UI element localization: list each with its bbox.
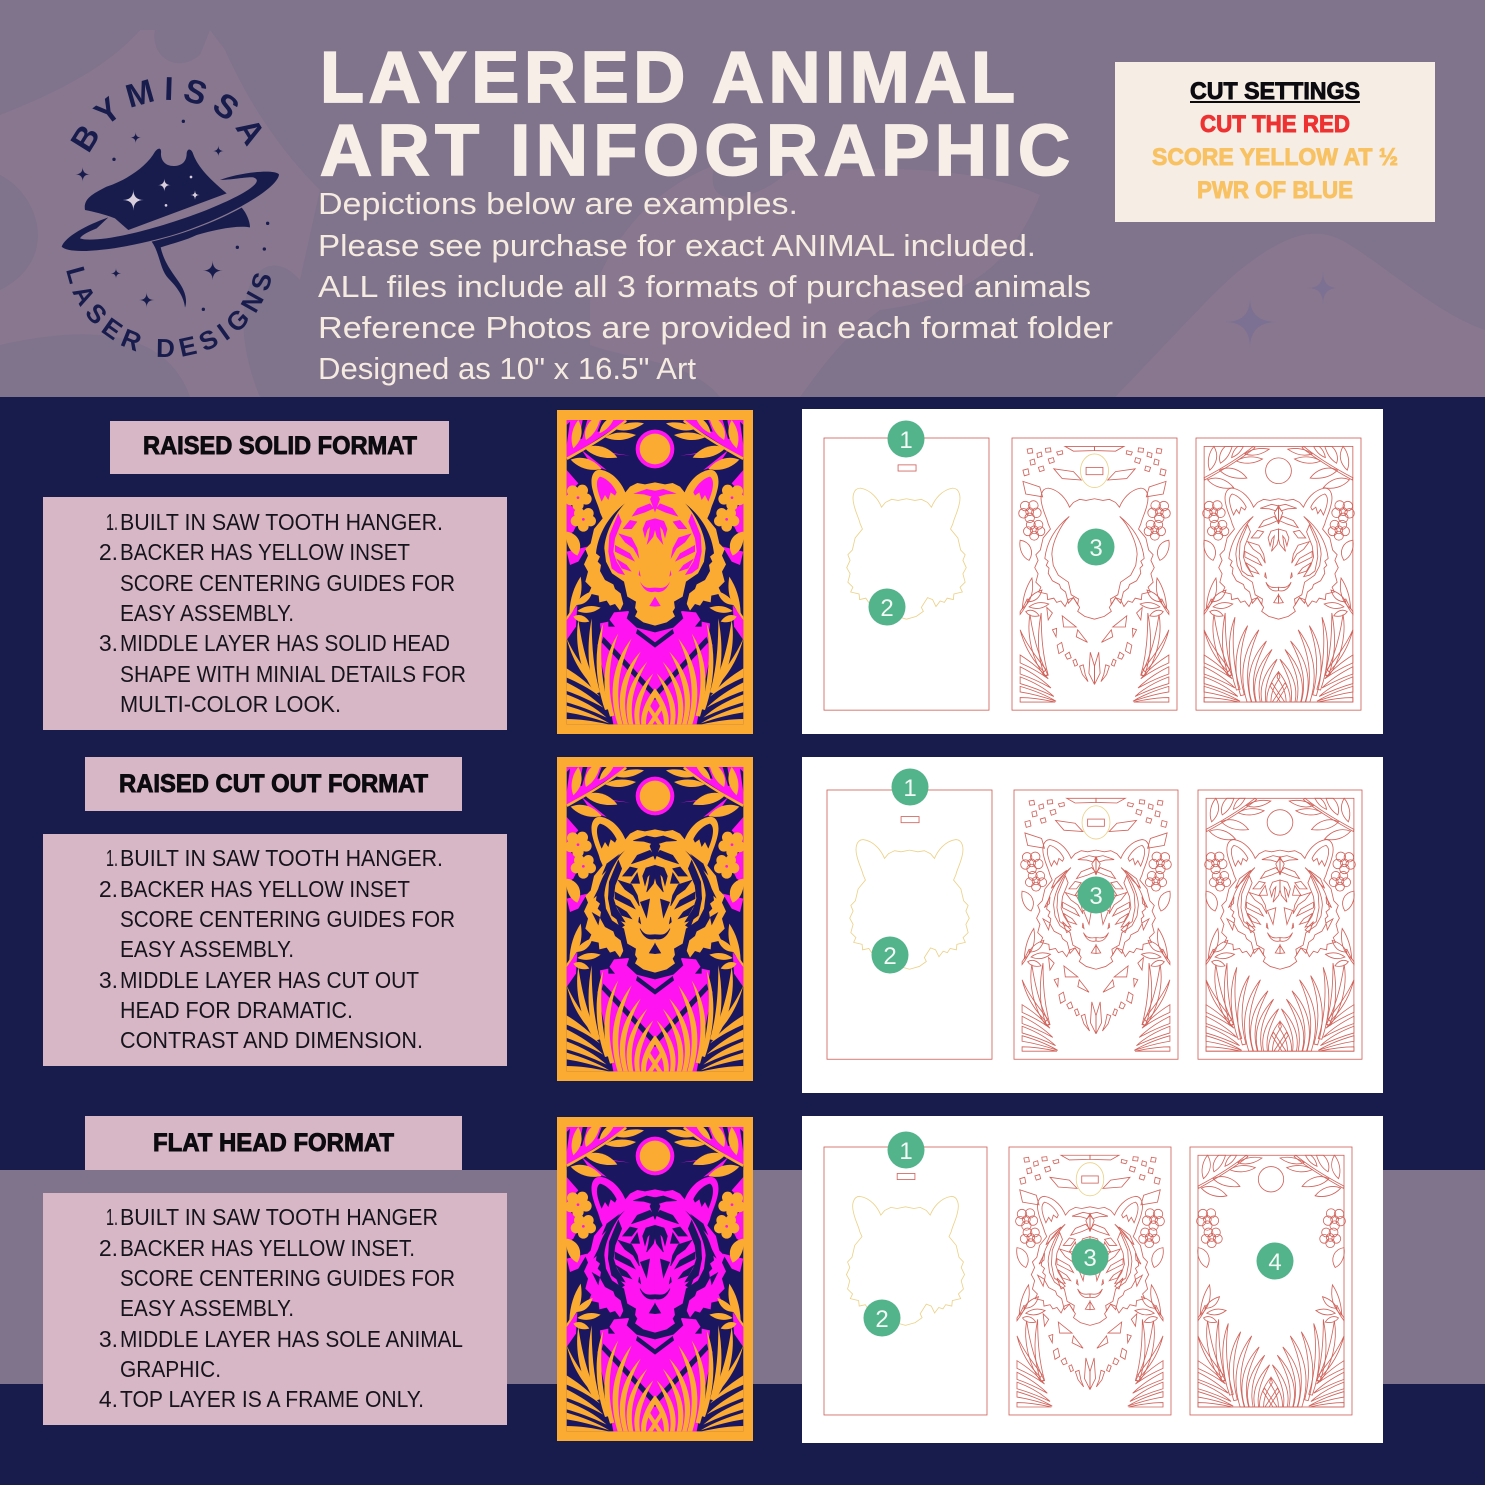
- text block: flat head format steps: 1.: [106, 1204, 118, 1230]
- badge 2: 2: [883, 943, 897, 970]
- badge 2: [872, 936, 908, 974]
- text block: raised cut out format steps: SCORE CENTERING GUIDES FOR: [120, 906, 455, 932]
- tiger art: raised cut out: [557, 757, 753, 1081]
- text block: raised cut out format steps: EASY ASSEMBLY.: [120, 936, 294, 962]
- badge 4: 4: [1268, 1249, 1282, 1276]
- text block: raised cut out format steps: HEAD FOR DRAMATIC.: [120, 997, 353, 1023]
- panel: raised solid layers: [802, 409, 1383, 734]
- badge 1: [888, 1132, 924, 1168]
- layer 3: top: [1196, 438, 1361, 710]
- text block: flat head format steps: EASY ASSEMBLY.: [120, 1295, 294, 1321]
- callout: cut settings: PWR OF BLUE: [1197, 177, 1353, 204]
- description text: [318, 186, 1113, 386]
- text block: raised solid format steps: 3.: [99, 630, 118, 656]
- text block: flat head format steps: 3.: [99, 1326, 118, 1352]
- description text: Depictions below are examples.: [318, 186, 798, 221]
- callout: cut settings: CUT SETTINGS: [1190, 78, 1360, 105]
- badge 1: 1: [899, 1138, 913, 1165]
- badge 3: [1078, 528, 1114, 566]
- layer 3: top frame: [1190, 1147, 1352, 1415]
- icon: manta ray with ring: [62, 120, 279, 311]
- badge 2: 2: [875, 1306, 889, 1333]
- layer 2: middle: [1012, 438, 1177, 710]
- layer 1: backer: [824, 438, 989, 710]
- text block: raised cut out format steps: 3.: [99, 967, 118, 993]
- text block: flat head format steps: TOP LAYER IS A FRAME ONLY.: [120, 1386, 424, 1412]
- badge 2: 2: [880, 595, 894, 622]
- text block: raised solid format steps: 2.: [99, 539, 118, 565]
- text block: raised cut out format steps: MIDDLE LAYER HAS CUT OUT: [120, 967, 419, 993]
- heading: raised cut out format: [85, 757, 462, 811]
- text block: raised solid format steps: MIDDLE LAYER HAS SOLID HEAD: [120, 630, 450, 656]
- logo text: brand top: BYMISSA: [70, 77, 262, 152]
- logo: [62, 77, 279, 357]
- text block: raised solid format steps: MULTI-COLOR LOOK.: [120, 691, 341, 717]
- text block: raised solid format steps: SCORE CENTERING GUIDES FOR: [120, 570, 455, 596]
- badge 3: 3: [1089, 883, 1103, 910]
- description text: Designed as 10" x 16.5" Art: [318, 351, 696, 386]
- text block: raised solid format steps: EASY ASSEMBLY.: [120, 600, 294, 626]
- panel: flat head layers: [802, 1116, 1383, 1443]
- text block: flat head format steps: [43, 1193, 507, 1425]
- text block: flat head format steps: SCORE CENTERING GUIDES FOR: [120, 1265, 455, 1291]
- title: [320, 38, 1070, 191]
- heading: raised cut out format: RAISED CUT OUT FORMAT: [119, 770, 428, 798]
- callout: cut settings: SCORE YELLOW AT ½: [1152, 144, 1398, 171]
- badge 2: [868, 588, 906, 626]
- badge 1: 1: [903, 775, 917, 802]
- text block: raised cut out format steps: 1.: [106, 845, 118, 871]
- callout: cut settings: [1115, 62, 1435, 222]
- badge 3: [1078, 876, 1114, 914]
- description text: Please see purchase for exact ANIMAL included.: [318, 228, 1036, 263]
- text block: raised cut out format steps: [43, 834, 507, 1066]
- text block: flat head format steps: 2.: [99, 1235, 118, 1261]
- title: ART INFOGRAPHIC: [320, 111, 1070, 191]
- layer 1: backer: [824, 1147, 987, 1415]
- text block: flat head format steps: BUILT IN SAW TOOTH HANGER: [120, 1204, 438, 1230]
- text block: raised cut out format steps: 2.: [99, 876, 118, 902]
- text block: flat head format steps: MIDDLE LAYER HAS SOLE ANIMAL: [120, 1326, 463, 1352]
- badge 3: 3: [1089, 535, 1103, 562]
- heading: raised solid format: RAISED SOLID FORMAT: [143, 432, 417, 460]
- header band: [0, 0, 1485, 397]
- badge 2: [864, 1300, 900, 1336]
- text block: raised cut out format steps: BUILT IN SAW TOOTH HANGER.: [120, 845, 443, 871]
- description text: Reference Photos are provided in each format folder: [318, 310, 1113, 345]
- heading: raised solid format: [110, 421, 449, 474]
- layer 1: backer: [827, 790, 992, 1059]
- badge 3: [1072, 1238, 1108, 1276]
- text block: raised solid format steps: [43, 497, 507, 730]
- text block: raised solid format steps: SHAPE WITH MINIAL DETAILS FOR: [120, 661, 466, 687]
- badge 1: 1: [899, 427, 913, 454]
- text block: raised cut out format steps: CONTRAST AND DIMENSION.: [120, 1027, 423, 1053]
- logo text: brand bottom: LASER DESIGNS: [66, 266, 271, 357]
- text block: flat head format steps: GRAPHIC.: [120, 1356, 221, 1382]
- badge 1: [888, 420, 924, 458]
- badge 3: 3: [1083, 1245, 1097, 1272]
- text block: flat head format steps: 4.: [99, 1386, 118, 1412]
- heading: flat head format: [85, 1116, 462, 1170]
- panel: raised cut out layers: [802, 757, 1383, 1093]
- title: LAYERED ANIMAL: [320, 38, 1015, 118]
- tiger art: raised solid: [557, 410, 753, 734]
- layer 2: middle: [1014, 790, 1178, 1059]
- badge 1: [892, 768, 928, 806]
- layer 3: top: [1198, 790, 1362, 1059]
- layer 2: middle: [1009, 1147, 1171, 1415]
- text block: raised solid format steps: 1.: [106, 509, 118, 535]
- description text: ALL files include all 3 formats of purchased animals: [318, 269, 1091, 304]
- badge 4: [1256, 1242, 1294, 1280]
- text block: flat head format steps: BACKER HAS YELLOW INSET.: [120, 1235, 415, 1261]
- heading: flat head format: FLAT HEAD FORMAT: [153, 1129, 394, 1157]
- text block: raised solid format steps: BACKER HAS YELLOW INSET: [120, 539, 410, 565]
- callout: cut settings: CUT THE RED: [1200, 111, 1350, 138]
- text block: raised cut out format steps: BACKER HAS YELLOW INSET: [120, 876, 410, 902]
- text block: raised solid format steps: BUILT IN SAW TOOTH HANGER.: [120, 509, 443, 535]
- tiger art: flat head: [557, 1117, 753, 1441]
